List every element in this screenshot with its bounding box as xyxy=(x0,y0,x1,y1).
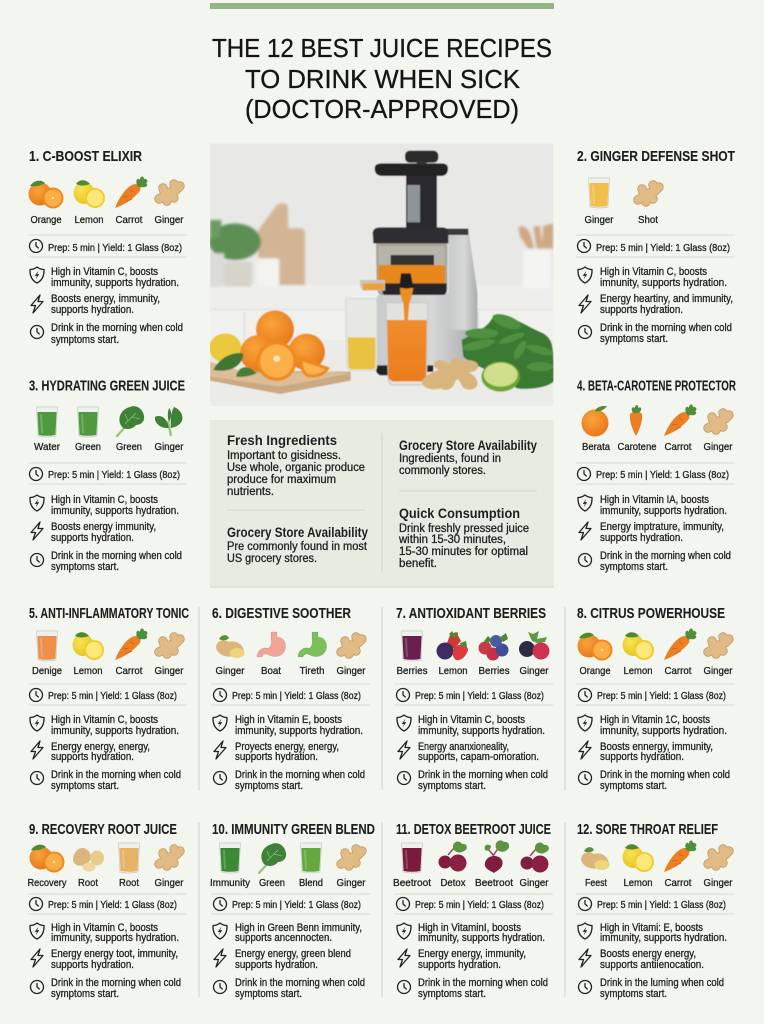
benefit: timing xyxy=(578,322,732,345)
ingredient: lemon: Lemon xyxy=(624,665,653,677)
heading: 5. ANTI-INFLAMMATORY TONIC xyxy=(29,605,189,622)
recipe card 7: Antioxidant Berries xyxy=(394,605,553,792)
prep and yield: Prep: 5 min | Yield: 1 Glass (8oz) xyxy=(415,899,544,911)
benefit: timing: Drink in the morning when cold xyxy=(418,769,548,781)
prep and yield: Prep: 5 min | Yield: 1 Glass (8oz) xyxy=(48,899,177,911)
ingredient: lemon xyxy=(72,632,104,677)
tip: grocery store availability, right xyxy=(399,437,537,477)
tip: fresh ingredients: Use whole, organic produce xyxy=(227,462,365,474)
benefit: immunity: High in Vitamin C, boosts xyxy=(51,494,158,506)
ingredient: ginger xyxy=(704,637,733,677)
benefit: immunity xyxy=(30,714,179,737)
prep and yield: Prep: 5 min | Yield: 1 Glass (8oz) xyxy=(415,690,544,702)
ingredient: dark green juice: Immunity xyxy=(210,877,251,889)
benefit: energy: supports hydration. xyxy=(51,304,134,316)
ingredient: lemon xyxy=(622,632,654,677)
benefit: timing: symptoms start. xyxy=(418,780,486,792)
recipe card 4: Beta-Carotene Protector xyxy=(576,378,736,573)
benefit: energy xyxy=(214,741,339,763)
benefit: immunity xyxy=(30,494,179,517)
ingredient: shot: Shot xyxy=(638,214,658,226)
ingredient: beetroot juice: Beetroot xyxy=(393,877,431,889)
benefit: timing xyxy=(398,769,548,792)
ingredient: beetroot: Beetroot xyxy=(475,877,513,889)
ingredient: ginger root: Feest xyxy=(585,877,607,889)
prep and yield: Prep: 5 min | Yield: 1 Glass (8oz) xyxy=(48,469,180,481)
prep and yield xyxy=(214,688,361,702)
ingredient: orange: Orange xyxy=(30,214,62,226)
benefit: immunity: High in Green Benn immunity, xyxy=(235,922,362,934)
ingredient: orange juice xyxy=(32,631,62,677)
benefit: energy xyxy=(398,741,539,763)
ingredient: ginger root xyxy=(216,635,245,677)
ingredient: beets with leaves: Detox xyxy=(440,877,466,889)
ingredient: lemon: Lemon xyxy=(74,214,104,226)
prep and yield: Prep: 5 min | Yield: 1 Glass (8oz) xyxy=(232,899,361,911)
prep and yield xyxy=(214,898,361,911)
prep and yield xyxy=(30,468,180,481)
ingredient: ginger xyxy=(154,184,184,226)
benefit: energy: supports hydration. xyxy=(418,959,501,971)
benefit: energy: supports hydration. xyxy=(235,751,318,763)
tip: grocery store availability, right: commonly stores. xyxy=(399,465,486,477)
ingredient: spinach xyxy=(259,843,286,889)
benefit: immunity: High in Vitamin IA, boosts xyxy=(600,494,709,506)
ingredient: blackberry and strawberry xyxy=(436,631,468,677)
benefit: energy xyxy=(31,293,160,316)
ingredient: orange: Berata xyxy=(582,441,610,453)
benefit: timing xyxy=(30,769,181,792)
ingredient: carrot: Carrot xyxy=(116,214,143,226)
ingredient: beetroot pair xyxy=(520,842,549,889)
heading: 9. RECOVERY ROOT JUICE xyxy=(29,821,177,838)
benefit: energy: Energy heartiny, and immunity, xyxy=(600,293,733,305)
prep and yield xyxy=(578,688,726,702)
ingredient: leafy greens xyxy=(154,407,184,453)
benefit: energy xyxy=(31,521,156,544)
tip: fresh ingredients: Important to gisidness. xyxy=(227,450,341,462)
tip: fresh ingredients: produce for maximum xyxy=(227,474,336,486)
benefit: immunity: imnunity, supports hydration. xyxy=(600,725,727,737)
benefit: timing: symptoms start. xyxy=(600,988,667,1000)
tip: quick consumption: within 15-30 minutes, xyxy=(398,534,506,546)
benefit: energy: supports, capam-omoration. xyxy=(418,751,539,763)
tip: grocery store availability, left: US grocery stores. xyxy=(227,553,317,565)
ingredient: ginger juice: Ginger xyxy=(584,214,614,226)
title: THE 12 BEST JUICE RECIPES xyxy=(212,35,552,63)
benefit: timing: Drink in the morning when cold xyxy=(51,550,182,562)
recipe card 6: Digestive Soother xyxy=(211,605,370,792)
ingredient: water: Water xyxy=(34,441,60,453)
benefit: timing: Drink in the morning when cold xyxy=(51,322,183,334)
benefit: energy: supports hydration. xyxy=(600,304,683,316)
benefit: timing: symptoms start. xyxy=(235,988,302,1000)
benefit: energy: Energy imptrature, immunity, xyxy=(600,521,724,533)
ingredient: shot xyxy=(638,185,659,226)
prep and yield: Prep: 5 min | Yield: 1 Glass (8oz) xyxy=(232,690,361,702)
ingredient: carrot xyxy=(664,404,696,453)
benefit: immunity: immunity, supports hydration. xyxy=(51,277,179,289)
benefit: immunity: High in Vitamin C, boosts xyxy=(418,714,525,726)
ingredient: ginger: Ginger xyxy=(336,665,366,677)
benefit: energy xyxy=(398,948,526,971)
tip: quick consumption: 15-30 minutes for optimal xyxy=(399,546,528,558)
ingredient: lemon: Lemon xyxy=(624,877,653,889)
benefit: immunity: immunity, supports hydration. xyxy=(51,932,179,944)
benefit: immunity: immunity, supports hydration. xyxy=(235,725,363,737)
ingredient: carotene carrot xyxy=(618,405,657,453)
benefit: energy xyxy=(214,948,351,971)
tip: grocery store availability, right: Ingredients, found in xyxy=(399,453,501,465)
benefit: energy: Energy energy toot, immunity, xyxy=(51,948,178,960)
heading: 1. C-BOOST ELIXIR xyxy=(29,148,142,165)
title xyxy=(212,35,552,124)
prep and yield: Prep: 5 min | Yield: 1 Glass (8oz) xyxy=(48,242,182,254)
tip: grocery store availability, left: Pre commonly found in most xyxy=(227,541,368,553)
ingredient: mixed berries: Berries xyxy=(478,665,510,677)
benefit: immunity: immunity, supports hydration. xyxy=(418,932,545,944)
benefit: energy: supports hydration. xyxy=(600,751,684,763)
benefit: energy: Boosts energy, immunity, xyxy=(51,293,160,305)
benefit: timing: Drink in the morning when cold xyxy=(600,322,732,334)
benefit: immunity: immunity, supports hydration. xyxy=(51,505,179,517)
benefit: timing: Drink in the morning when cold xyxy=(235,977,365,989)
benefit: timing xyxy=(398,977,548,1000)
ingredient: orange: Recovery xyxy=(28,877,67,889)
benefit: immunity xyxy=(397,714,545,737)
ingredient: carrot xyxy=(664,840,696,889)
ingredient: ginger xyxy=(336,637,366,677)
benefit: immunity xyxy=(30,266,179,289)
benefit: timing: symptoms start. xyxy=(51,780,119,792)
benefit: immunity xyxy=(578,494,727,517)
ingredient: orange xyxy=(578,633,612,677)
benefit: energy: Proyects energy, energy, xyxy=(235,741,339,753)
ingredient: blackberry and raspberry: Ginger xyxy=(520,665,549,677)
ingredient: green juice: Blend xyxy=(299,877,323,889)
benefit: timing: symptoms start. xyxy=(600,561,668,573)
title: (DOCTOR-APPROVED) xyxy=(245,96,519,124)
ingredient: ginger: Ginger xyxy=(154,877,184,889)
benefit: energy: supports hydration. xyxy=(51,959,134,971)
top accent bar xyxy=(210,3,554,9)
ingredient: green juice xyxy=(75,407,101,453)
benefit: energy xyxy=(579,741,713,763)
info panel: tips xyxy=(210,420,554,587)
benefit: timing: symptoms start. xyxy=(51,561,119,573)
ingredient: water xyxy=(34,407,60,453)
benefit: timing: symptoms start. xyxy=(235,780,303,792)
benefit: immunity xyxy=(213,922,362,944)
benefit: immunity: High in Vitamin C, boosts xyxy=(600,266,707,278)
benefit: immunity: imnunity, supports hydration. xyxy=(600,277,727,289)
benefit: energy xyxy=(579,293,733,316)
ingredient: carrot xyxy=(115,176,147,226)
benefit: timing xyxy=(214,769,365,792)
benefit: timing: Drink in the morning when cold xyxy=(235,769,365,781)
prep and yield xyxy=(396,898,544,911)
ingredient: dark green juice xyxy=(210,843,251,889)
ingredient: carrot: Carrot xyxy=(116,665,143,677)
prep and yield xyxy=(578,898,726,911)
benefit: timing xyxy=(578,550,731,573)
ingredient: ginger: Ginger xyxy=(154,665,184,677)
benefit: immunity: immunity, supports hydration. xyxy=(418,725,545,737)
benefit: energy: supports antiienocation. xyxy=(600,959,704,971)
tip: fresh ingredients xyxy=(227,432,365,498)
title: TO DRINK WHEN SICK xyxy=(245,66,520,94)
ingredient: orange juice: Denige xyxy=(32,665,62,677)
benefit: timing: symptoms start. xyxy=(600,333,668,345)
benefit: immunity xyxy=(578,714,727,737)
tip: grocery store availability, left: Grocery Store Availability xyxy=(227,524,368,540)
benefit: immunity: High in Vitamin C, boosts xyxy=(51,266,158,278)
benefit: immunity: immunity, supports hydration. xyxy=(51,725,179,737)
prep and yield: Prep: 5 min | Yield: 1 Glass (8oz) xyxy=(597,899,726,911)
ingredient: ginger: Ginger xyxy=(704,877,733,889)
ingredient: root juice: Root xyxy=(119,877,139,889)
ingredient: ginger: Ginger xyxy=(154,214,184,226)
ingredient: ginger: Ginger xyxy=(336,877,366,889)
benefit: timing: Drink in the luming when cold xyxy=(600,977,724,989)
heading: 7. ANTIOXIDANT BERRIES xyxy=(396,605,546,622)
benefit: timing: Drink in the morning when cold xyxy=(418,977,548,989)
ingredient: ginger xyxy=(154,637,184,677)
ingredient: green stomach: Tireth xyxy=(300,665,325,677)
benefit: energy: supports hydration. xyxy=(235,959,318,971)
benefit: energy xyxy=(579,948,704,971)
benefit: immunity: supports ancennocten. xyxy=(235,932,332,944)
ingredient: ginger root: Ginger xyxy=(216,665,245,677)
ingredient: orange: Orange xyxy=(580,665,611,677)
tip: quick consumption xyxy=(398,505,529,570)
ingredient: berry juice xyxy=(396,631,428,677)
benefit: energy: supports hydration. xyxy=(51,751,134,763)
tip: quick consumption: benefit. xyxy=(399,558,437,570)
prep and yield: Prep: 5 min | Yield: 1 Glass (8oz) xyxy=(597,690,726,702)
prep and yield xyxy=(30,240,182,254)
benefit: energy: Boosts energy energy, xyxy=(600,948,696,960)
recipe card 5: Anti-Inflammatory Tonic xyxy=(28,605,189,792)
ingredient: green juice xyxy=(299,843,323,889)
tip: quick consumption: Drink freshly pressed juice xyxy=(399,523,529,535)
ingredient: green stomach xyxy=(298,632,327,677)
recipe card 2: Ginger Defense Shot xyxy=(576,148,735,345)
ingredient: ginger xyxy=(336,849,366,889)
tip: grocery store availability, left xyxy=(227,524,368,565)
ingredient: lemon xyxy=(622,844,654,889)
prep and yield: Prep: 5 min | Yield: 1 Glass (8oz) xyxy=(596,242,730,254)
recipe card 11: Detox Beetroot Juice xyxy=(393,821,553,1000)
ingredient: lemon: Lemon xyxy=(74,665,103,677)
benefit: energy: Energy energy, green blend xyxy=(235,948,351,960)
prep and yield xyxy=(30,898,177,911)
prep and yield xyxy=(578,468,729,481)
benefit: timing: Drink in the morning when cold xyxy=(51,977,181,989)
benefit: immunity: immunity, supports hydration. xyxy=(600,932,727,944)
ingredient: orange xyxy=(28,845,67,889)
heading: 10. IMMUNITY GREEN BLEND xyxy=(212,821,375,838)
heading: 6. DIGESTIVE SOOTHER xyxy=(212,605,351,622)
benefit: immunity: High in Vitamin C, boosts xyxy=(51,922,158,934)
ingredient: orange xyxy=(582,406,610,453)
ingredient: beetroot juice xyxy=(393,843,431,889)
prep and yield: Prep: 5 min | Yield: 1 Glass (8oz) xyxy=(48,690,177,702)
ingredient: ginger xyxy=(704,413,733,453)
tip: fresh ingredients: Fresh Ingredients xyxy=(227,432,337,448)
benefit: immunity xyxy=(397,922,545,944)
ingredient: root: Root xyxy=(78,877,98,889)
ingredient: berry juice: Berries xyxy=(396,665,428,677)
ingredient: carrot: Carrot xyxy=(664,441,692,453)
ingredient: spinach: Green xyxy=(259,877,285,889)
benefit: timing: symptoms start. xyxy=(600,780,667,792)
ingredient: leafy greens: Ginger xyxy=(154,441,184,453)
ingredient: spinach: Green xyxy=(116,441,142,453)
ingredient: blackberry and strawberry: Lemon xyxy=(438,665,468,677)
heading: 11. DETOX BEETROOT JUICE xyxy=(396,821,551,838)
benefit: immunity xyxy=(578,266,727,289)
benefit: immunity: High in Vitamin 1C, boosts xyxy=(600,714,710,726)
benefit: immunity: immunity, supports hydration. xyxy=(600,505,727,517)
heading: 12. SORE THROAT RELIEF xyxy=(577,821,718,838)
prep and yield xyxy=(396,688,544,702)
ingredient: carrot xyxy=(115,628,147,677)
benefit: timing: Drink in the morning when cold xyxy=(600,550,731,562)
prep and yield: Prep: 5 min | Yield: 1 Glass (8oz) xyxy=(596,469,729,481)
recipe card 9: Recovery Root Juice xyxy=(28,821,187,1000)
ingredient: ginger xyxy=(154,849,184,889)
benefit: energy xyxy=(579,521,724,544)
ingredient: carrot xyxy=(664,628,696,677)
ingredient: beetroot pair: Ginger xyxy=(520,877,549,889)
ingredient: carrot: Carrot xyxy=(664,665,692,677)
benefit: energy xyxy=(31,741,150,763)
ingredient: spinach xyxy=(116,406,144,453)
benefit: immunity xyxy=(30,922,179,944)
benefit: timing: Drink in the morning when cold xyxy=(600,769,730,781)
recipe card 10: Immunity Green Blend xyxy=(210,821,375,1000)
ingredient: beets with leaves xyxy=(438,841,467,889)
ingredient: lemon xyxy=(74,180,105,226)
ingredient: ginger juice xyxy=(584,178,614,226)
benefit: timing xyxy=(578,769,730,792)
benefit: energy: supports hydration. xyxy=(600,532,683,544)
ingredient: beetroot xyxy=(475,840,513,889)
benefit: energy: Boosts ennergy, immunity, xyxy=(600,741,713,753)
recipe card 8: Citrus Powerhouse xyxy=(576,605,735,792)
ingredient: root juice xyxy=(118,843,140,889)
ingredient: green juice: Green xyxy=(75,441,101,453)
benefit: immunity: High in Vitamin C, boosts xyxy=(51,714,158,726)
recipe card 12: Sore Throat Relief xyxy=(576,821,735,1000)
heading: 8. CITRUS POWERHOUSE xyxy=(577,605,725,622)
benefit: energy: supports hydration. xyxy=(51,532,134,544)
benefit: energy: Energy energy, immunity, xyxy=(418,948,526,960)
prep and yield xyxy=(578,240,730,254)
benefit: energy: Energy ananxioneality, xyxy=(418,741,509,753)
benefit: energy xyxy=(31,948,178,971)
prep and yield xyxy=(30,688,177,702)
benefit: timing xyxy=(30,322,183,346)
ingredient: pink stomach xyxy=(257,632,286,677)
benefit: immunity xyxy=(578,922,727,944)
tip: fresh ingredients: nutrients. xyxy=(227,486,274,498)
ingredient: orange xyxy=(28,181,64,226)
recipe card 1: C-Boost Elixir xyxy=(28,148,187,346)
benefit: timing xyxy=(30,550,182,573)
ingredient: root xyxy=(73,848,104,889)
benefit: timing: symptoms start. xyxy=(51,988,119,1000)
ingredient: ginger root xyxy=(581,847,610,889)
tip: quick consumption: Quick Consumption xyxy=(399,505,520,521)
ingredient: ginger: Ginger xyxy=(704,665,733,677)
ingredient: mixed berries xyxy=(478,633,510,677)
tip: grocery store availability, right: Grocery Store Availability xyxy=(399,437,537,453)
recipe card 3: Hydrating Green Juice xyxy=(28,378,187,573)
benefit: energy: Energy energy, energy, xyxy=(51,741,150,753)
benefit: timing: Drink in the morning when cold xyxy=(51,769,181,781)
benefit: timing xyxy=(578,977,724,1000)
heading: 3. HYDRATING GREEN JUICE xyxy=(29,378,185,394)
benefit: immunity: High in VitaminI, boosts xyxy=(418,922,521,934)
ingredient: ginger: Ginger xyxy=(704,441,733,453)
ingredient: blackberry and raspberry xyxy=(519,631,550,677)
benefit: timing: symptoms start. xyxy=(51,334,119,346)
benefit: immunity: High in Vitamin E, boosts xyxy=(235,714,342,726)
ingredient: carrot: Carrot xyxy=(664,877,692,889)
benefit: energy: Boosts energy immunity, xyxy=(51,521,156,533)
benefit: timing: symptoms start. xyxy=(418,988,486,1000)
benefit: immunity: High in Vitami: E, boosts xyxy=(600,922,703,934)
ingredient: ginger xyxy=(704,849,733,889)
benefit: immunity xyxy=(213,714,363,737)
benefit: timing xyxy=(214,977,365,1000)
ingredient: carotene carrot: Carotene xyxy=(618,441,657,453)
benefit: timing xyxy=(30,977,181,1000)
hero photo: juicer with fresh produce xyxy=(209,143,555,406)
ingredient: pink stomach: Boat xyxy=(261,665,281,677)
